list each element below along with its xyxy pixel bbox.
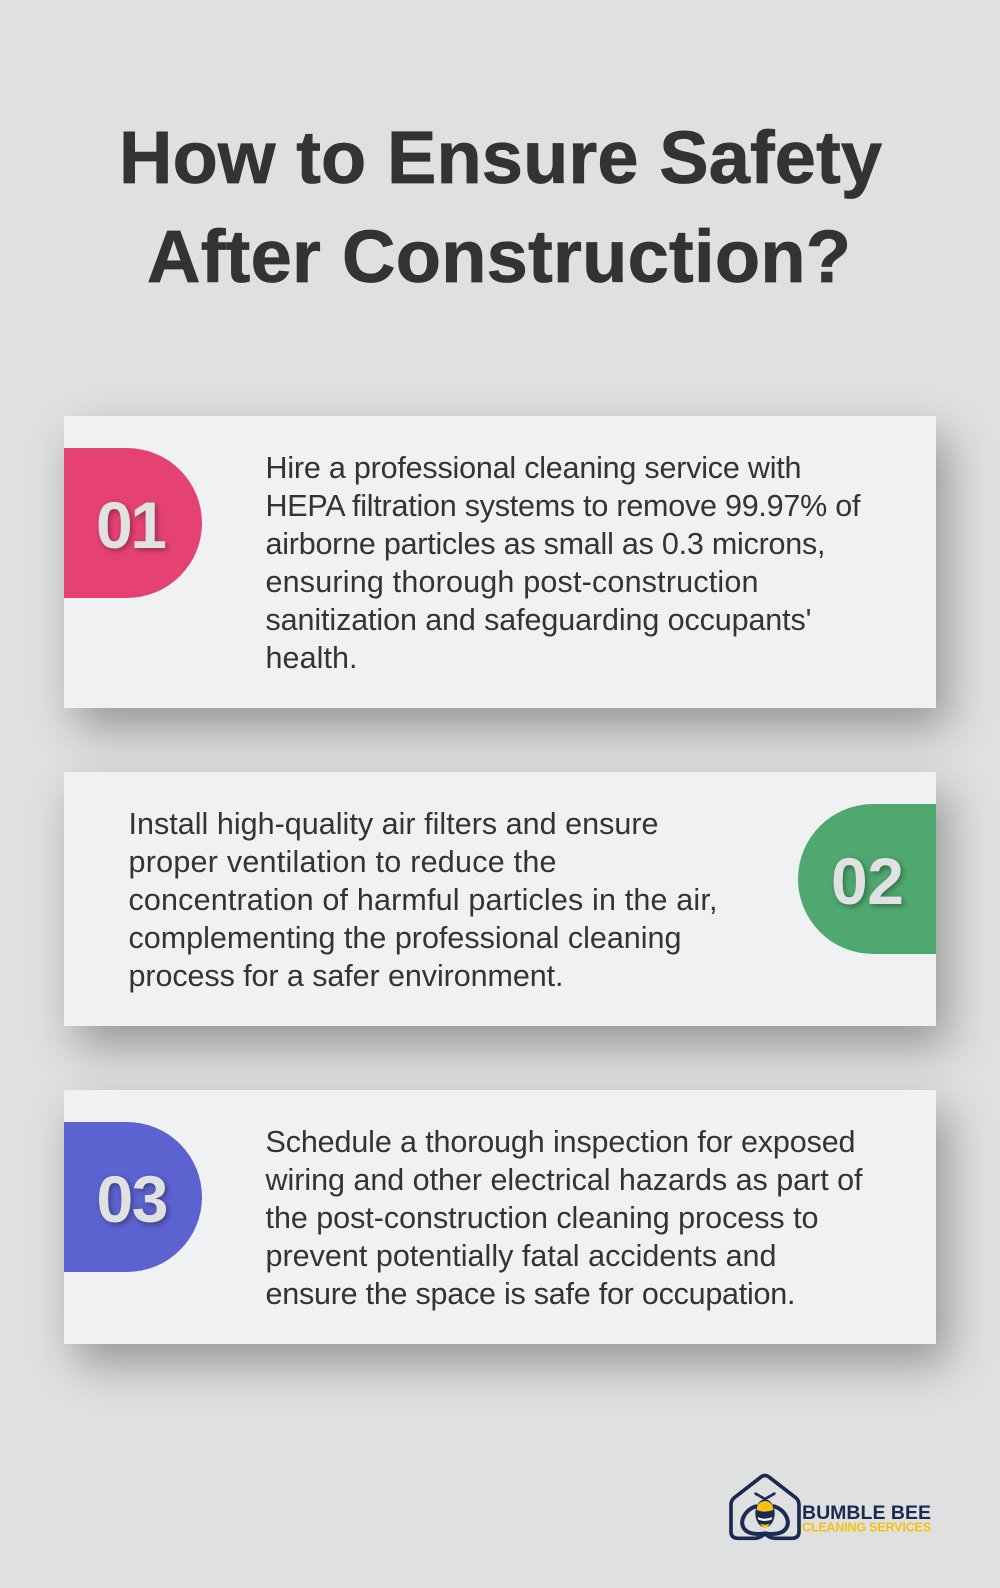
number 02: 02 xyxy=(831,844,904,918)
number 03: 03 xyxy=(96,1162,168,1236)
text: step 3: ensure the space is safe for occupation. xyxy=(266,1277,796,1311)
panel: step 3 xyxy=(64,1090,936,1344)
text: step 1 xyxy=(266,451,861,675)
panel: step 2 xyxy=(64,772,936,1026)
text: step 3: the post-construction cleaning process to xyxy=(266,1201,818,1235)
title: How to Ensure Safety xyxy=(119,116,882,199)
text: step 3 xyxy=(264,1125,863,1311)
text: step 3: Schedule a thorough inspection for exposed xyxy=(266,1125,856,1159)
badge: 01 xyxy=(64,448,202,598)
text: step 2: complementing the professional cleaning xyxy=(128,921,682,955)
text: step 1: sanitization and safeguarding occupants' xyxy=(266,603,812,637)
text: step 1: airborne particles as small as 0.3 microns, xyxy=(266,527,826,561)
text: step 1: ensuring thorough post-construction xyxy=(266,565,758,599)
text: step 3: prevent potentially fatal accidents and xyxy=(266,1239,776,1273)
text: step 2: process for a safer environment. xyxy=(128,959,564,993)
logo wordmark: BUMBLE BEE xyxy=(802,1502,931,1524)
text: step 2 xyxy=(128,807,718,993)
icon: house with bee xyxy=(731,1475,799,1538)
logo tagline: CLEANING SERVICES xyxy=(802,1520,931,1534)
title xyxy=(119,116,882,298)
badge: 03 xyxy=(64,1122,202,1272)
number 01: 01 xyxy=(96,488,167,562)
text: step 1: health. xyxy=(266,641,358,675)
logo: Bumble Bee Cleaning Services xyxy=(731,1475,931,1538)
title: After Construction? xyxy=(147,215,851,298)
panel: step 1 xyxy=(64,416,936,708)
text: step 3: wiring and other electrical hazards as part of xyxy=(264,1163,863,1197)
text: step 2: concentration of harmful particles in the air, xyxy=(128,883,718,917)
text: step 2: proper ventilation to reduce the xyxy=(128,845,556,879)
text: step 1: HEPA filtration systems to remove 99.97% of xyxy=(266,489,861,523)
text: step 1: Hire a professional cleaning service with xyxy=(266,451,802,485)
text: step 2: Install high-quality air filters and ensure xyxy=(128,807,658,841)
badge: 02 xyxy=(798,804,936,954)
